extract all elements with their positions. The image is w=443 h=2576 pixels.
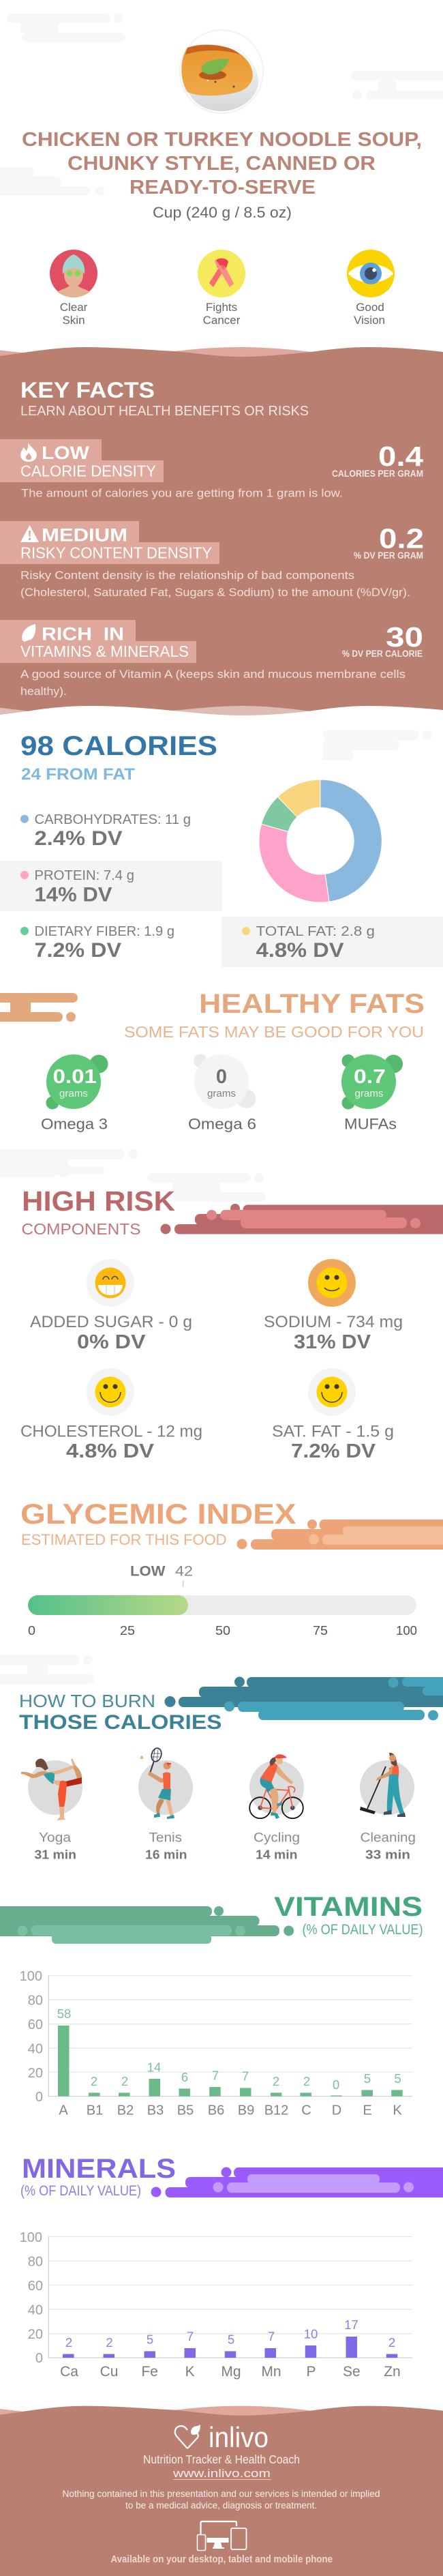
heading: GLYCEMIC INDEX [20,1498,296,1530]
panel: vitamins [0,1892,423,2118]
bar chart: minerals: Se [343,2364,361,2380]
decorative banner: orange cloud [237,1520,443,1550]
high risk background clouds [0,1149,266,1202]
bar chart: vitamins [20,1969,412,2118]
bar chart: minerals: 10 [304,2327,318,2341]
fact: rich in vitamins and minerals: 30 [386,621,423,653]
donut chart [259,780,382,902]
bar chart: vitamins: 7 [242,2069,249,2084]
bar chart: vitamins: A [59,2103,68,2118]
activity: yoga: 31 min [34,1848,76,1862]
bar chart: vitamins: 2 [303,2074,310,2088]
fact: risky content density: (Cholesterol, Saturated Fat, Sugars & Sodium) to the amount (%DV/gr). [20,587,410,599]
title: CHUNKY STYLE, CANNED OR [67,153,376,175]
bar chart: vitamins: B6 [208,2103,224,2118]
legend: carbohydrates: CARBOHYDRATES: 11 g [34,812,191,827]
panel: key facts [0,347,443,715]
icon: warning triangle [20,525,39,542]
fact: calorie density [0,439,423,499]
bar chart: minerals: Fe [141,2364,158,2380]
bar chart: minerals: Ca [60,2364,78,2380]
icon: eye [347,250,395,297]
icon: yoga figure [21,1758,82,1820]
component: cholesterol: 4.8% DV [66,1440,155,1462]
tagline: Nutrition Tracker & Health Coach [143,2453,300,2466]
metric: omega 6: grams [207,1088,236,1099]
disclaimer: Nothing contained in this presentation and our services is intended or implied [63,2489,380,2499]
bar chart: minerals: Mn [261,2364,281,2380]
bar chart: minerals: 5 [228,2333,234,2347]
bar chart: vitamins: 100 [20,1969,42,1984]
activity: tennis: Tenis [149,1831,182,1846]
subheading: (% OF DAILY VALUE) [20,2183,141,2199]
icon: person sweeping [360,1753,414,1817]
heading: VITAMINS [274,1892,423,1922]
gauge value: LOW [130,1564,166,1580]
fact: rich in vitamins and minerals: A good source of Vitamin A (keeps skin and mucous membrane cells [20,668,406,681]
bar chart: minerals: Mg [221,2364,241,2380]
bar chart: vitamins: E [363,2103,372,2118]
bar chart: minerals: 2 [65,2335,72,2350]
metric: omega 6: 0 [216,1066,227,1088]
component: saturated fat: 7.2% DV [291,1440,376,1462]
metric: MUFAs [341,1054,403,1132]
bar chart: minerals: K [185,2364,195,2380]
gauge value: 42 [175,1564,193,1580]
activity: yoga: Yoga [39,1831,71,1846]
panel: high risk components [20,1185,443,1462]
icon: desktop, tablet and phone [198,2521,247,2551]
fact: risky content density: Risky Content density is the relationship of bad components [20,569,354,582]
fact: risky content density: MEDIUM [42,525,127,546]
benefit: fights cancer: Cancer [203,314,241,327]
bar chart: minerals: P [306,2364,316,2380]
fact: calorie density: LOW [42,443,90,463]
bar chart: vitamins: B1 [87,2103,103,2118]
bar chart: vitamins: 5 [364,2071,371,2086]
bar chart: vitamins: C [301,2103,311,2118]
bar chart: vitamins: K [393,2103,402,2118]
heading: MINERALS [22,2154,176,2184]
bar chart: vitamins: B3 [147,2103,164,2118]
fact: rich in vitamins and minerals: RICH IN [42,623,124,644]
icon: smiling face [87,1368,134,1416]
legend: protein [0,861,222,911]
fact: risky content density: 0.2 [379,522,424,554]
bar chart: vitamins: 80 [28,1993,43,2008]
activity: tennis: 16 min [145,1848,187,1862]
availability note: Available on your desktop, tablet and mobile phone [110,2553,333,2565]
bar chart: vitamins: 0 [35,2090,43,2105]
panel: healthy fats [0,989,425,1132]
subheading: 24 FROM FAT [21,765,135,784]
bar chart: vitamins: D [332,2103,341,2118]
subheading: LEARN ABOUT HEALTH BENEFITS OR RISKS [20,404,309,419]
heading: KEY FACTS [20,378,155,402]
component: sodium [264,1259,403,1353]
legend: carbohydrates: 2.4% DV [34,827,123,850]
legend: protein: PROTEIN: 7.4 g [34,868,134,883]
icon: smiling face [308,1368,356,1416]
activity: cleaning [360,1753,416,1862]
icon: grinning face [87,1259,134,1307]
metric: MUFAs: grams [354,1088,383,1099]
bar chart: vitamins: B12 [264,2103,288,2118]
bar chart: minerals: 5 [147,2333,153,2347]
gauge bar [28,1595,416,1615]
legend: total fat [222,917,443,967]
benefit: clear skin: Clear [60,301,88,314]
activity: yoga [21,1758,82,1862]
subheading: ESTIMATED FOR THIS FOOD [21,1531,226,1548]
legend: dietary fiber: 7.2% DV [34,939,121,962]
component: cholesterol [20,1368,202,1462]
disclaimer [63,2489,380,2511]
legend: total fat: TOTAL FAT: 2.8 g [256,924,375,939]
bar chart: vitamins: 60 [28,2017,43,2032]
bar chart: vitamins: 2 [91,2074,97,2088]
gauge scale: 0 [28,1623,35,1638]
bar chart: minerals: 60 [28,2279,43,2294]
burn background cloud [0,1655,95,1684]
bar chart: vitamins: 58 [57,2007,71,2021]
benefit: fights cancer: Fights [206,301,237,314]
legend: dietary fiber: DIETARY FIBER: 1.9 g [34,924,174,939]
fact: calorie density: 0.4 [378,441,423,472]
website: www.inlivo.com [172,2467,271,2480]
decorative banner: red cloud [161,1204,443,1234]
activity: cleaning: Cleaning [360,1831,416,1846]
decorative banner: orange cloud [0,993,78,1022]
fact: risky content density: RISKY CONTENT DENSITY [20,544,212,562]
activity: cycling: 14 min [256,1848,297,1862]
component: saturated fat [272,1368,394,1462]
fact: calorie density: The amount of calories you are getting from 1 gram is low. [21,487,343,499]
bar chart: minerals: Zn [384,2364,401,2380]
gauge scale [28,1623,417,1638]
bar chart: vitamins: B2 [117,2103,134,2118]
component: sodium: 31% DV [294,1331,371,1353]
metric: omega 3: 0.01 [53,1066,97,1088]
panel: how to burn those calories [19,1676,443,1862]
logo: inlivo [209,2421,269,2453]
fact: risky content density [0,521,424,599]
activity: cleaning: 33 min [365,1848,410,1862]
bar chart: minerals: 100 [20,2230,42,2245]
legend: protein: 14% DV [34,884,112,906]
icon: leaf [22,624,35,642]
subheading: COMPONENTS [22,1220,140,1238]
benefit: fights cancer [198,250,245,327]
benefit: good vision: Good [356,301,384,314]
benefit: good vision: Vision [354,314,385,327]
title [22,129,422,198]
icon: flame [20,443,37,462]
benefit: clear skin: Skin [62,314,85,327]
fact: calorie density: CALORIES PER GRAM [332,469,423,479]
bar chart: vitamins: B9 [238,2103,254,2118]
bar chart: vitamins: 2 [121,2074,128,2088]
icon: ribbon [198,250,245,297]
bar chart: vitamins: 20 [28,2066,43,2081]
logo [175,2421,269,2453]
panel: glycemic index [20,1498,443,1638]
heading: THOSE CALORIES [19,1711,222,1734]
icon: smiling face [308,1259,356,1307]
bar chart: minerals: 40 [28,2303,43,2318]
component: cholesterol: CHOLESTEROL - 12 mg [20,1423,202,1440]
bar chart: vitamins: 6 [181,2070,188,2084]
activity: cycling [249,1754,304,1862]
bar chart: minerals: 20 [28,2327,43,2342]
metric: omega 3: grams [59,1088,88,1099]
title: READY-TO-SERVE [129,177,316,198]
bar chart: minerals: 2 [106,2335,113,2350]
component: added sugar: ADDED SUGAR - 0 g [30,1313,192,1331]
decorative banner: teal cloud [165,1676,443,1720]
food image: soup bowl [180,30,263,113]
serving size: Cup (240 g / 8.5 oz) [153,204,292,221]
panel: calories [0,731,443,967]
heading: 98 CALORIES [20,731,217,761]
icon: heart with leaf [175,2425,200,2448]
bar chart: vitamins: B5 [177,2103,194,2118]
bar chart: minerals [20,2230,412,2380]
metric: omega 3: Omega 3 [41,1116,108,1132]
bar chart: minerals: Cu [100,2364,118,2380]
metric: MUFAs: MUFAs [344,1116,397,1132]
bar chart: minerals: 2 [388,2335,395,2350]
metric: omega 6 [188,1054,256,1132]
component: added sugar: 0% DV [77,1331,146,1353]
legend: carbohydrates [20,812,191,850]
title: CHICKEN OR TURKEY NOODLE SOUP, [22,129,422,151]
fact: rich in vitamins and minerals: healthy). [20,685,67,698]
header background clouds [0,14,443,196]
bar chart: minerals: 0 [35,2351,43,2366]
legend: total fat: 4.8% DV [256,939,344,962]
calories background cloud [322,730,432,760]
metric: MUFAs: 0.7 [354,1066,386,1088]
fact: calorie density: CALORIE DENSITY [20,462,156,480]
metric: omega 6: Omega 6 [188,1116,256,1132]
fact: rich in vitamins and minerals [0,620,423,698]
subheading: (% OF DAILY VALUE) [303,1922,423,1938]
gauge scale: 25 [120,1623,135,1638]
legend: dietary fiber [20,924,174,962]
metric: omega 3 [41,1054,108,1132]
bar chart: vitamins: 0 [333,2077,339,2092]
benefit: good vision [347,250,395,327]
gauge scale: 100 [396,1623,417,1638]
icon: cyclist [249,1754,304,1819]
benefit: clear skin [50,250,97,327]
subheading: SOME FATS MAY BE GOOD FOR YOU [124,1023,424,1041]
heading: HIGH RISK [22,1185,175,1217]
disclaimer: to be a medical advice, diagnosis or treatment. [125,2500,317,2511]
activity: tennis [138,1747,193,1862]
fact: rich in vitamins and minerals: VITAMINS & MINERALS [20,642,189,660]
component: added sugar [30,1259,192,1353]
gauge scale: 50 [215,1623,230,1638]
component: saturated fat: SAT. FAT - 1.5 g [272,1423,394,1440]
bar chart: vitamins: 7 [212,2069,219,2083]
panel: minerals [20,2154,443,2380]
decorative banner: purple cloud [151,2167,443,2197]
heading [19,1691,222,1734]
bar chart: vitamins: 40 [28,2041,43,2056]
fact: risky content density: % DV PER GRAM [354,550,423,561]
panel: footer [0,2406,443,2576]
bar chart: minerals: 17 [344,2318,358,2332]
activity: cycling: Cycling [254,1831,300,1846]
gauge value [130,1564,193,1587]
heading: HOW TO BURN [19,1691,155,1711]
bar chart: minerals: 7 [268,2329,275,2343]
bar chart: minerals: 80 [28,2255,43,2270]
icon: tennis player [138,1747,193,1819]
bar chart: vitamins: 5 [394,2071,401,2086]
decorative banner: green cloud [0,1906,294,1944]
fact: rich in vitamins and minerals: % DV PER CALORIE [342,649,423,659]
bar chart: vitamins: 2 [273,2074,279,2088]
bar chart: minerals: 7 [187,2329,194,2343]
gauge scale: 75 [313,1623,328,1638]
bar chart: vitamins: 14 [147,2060,161,2075]
component: sodium: SODIUM - 734 mg [264,1313,403,1331]
icon: woman with face mask [50,250,97,297]
heading: HEALTHY FATS [199,989,425,1019]
